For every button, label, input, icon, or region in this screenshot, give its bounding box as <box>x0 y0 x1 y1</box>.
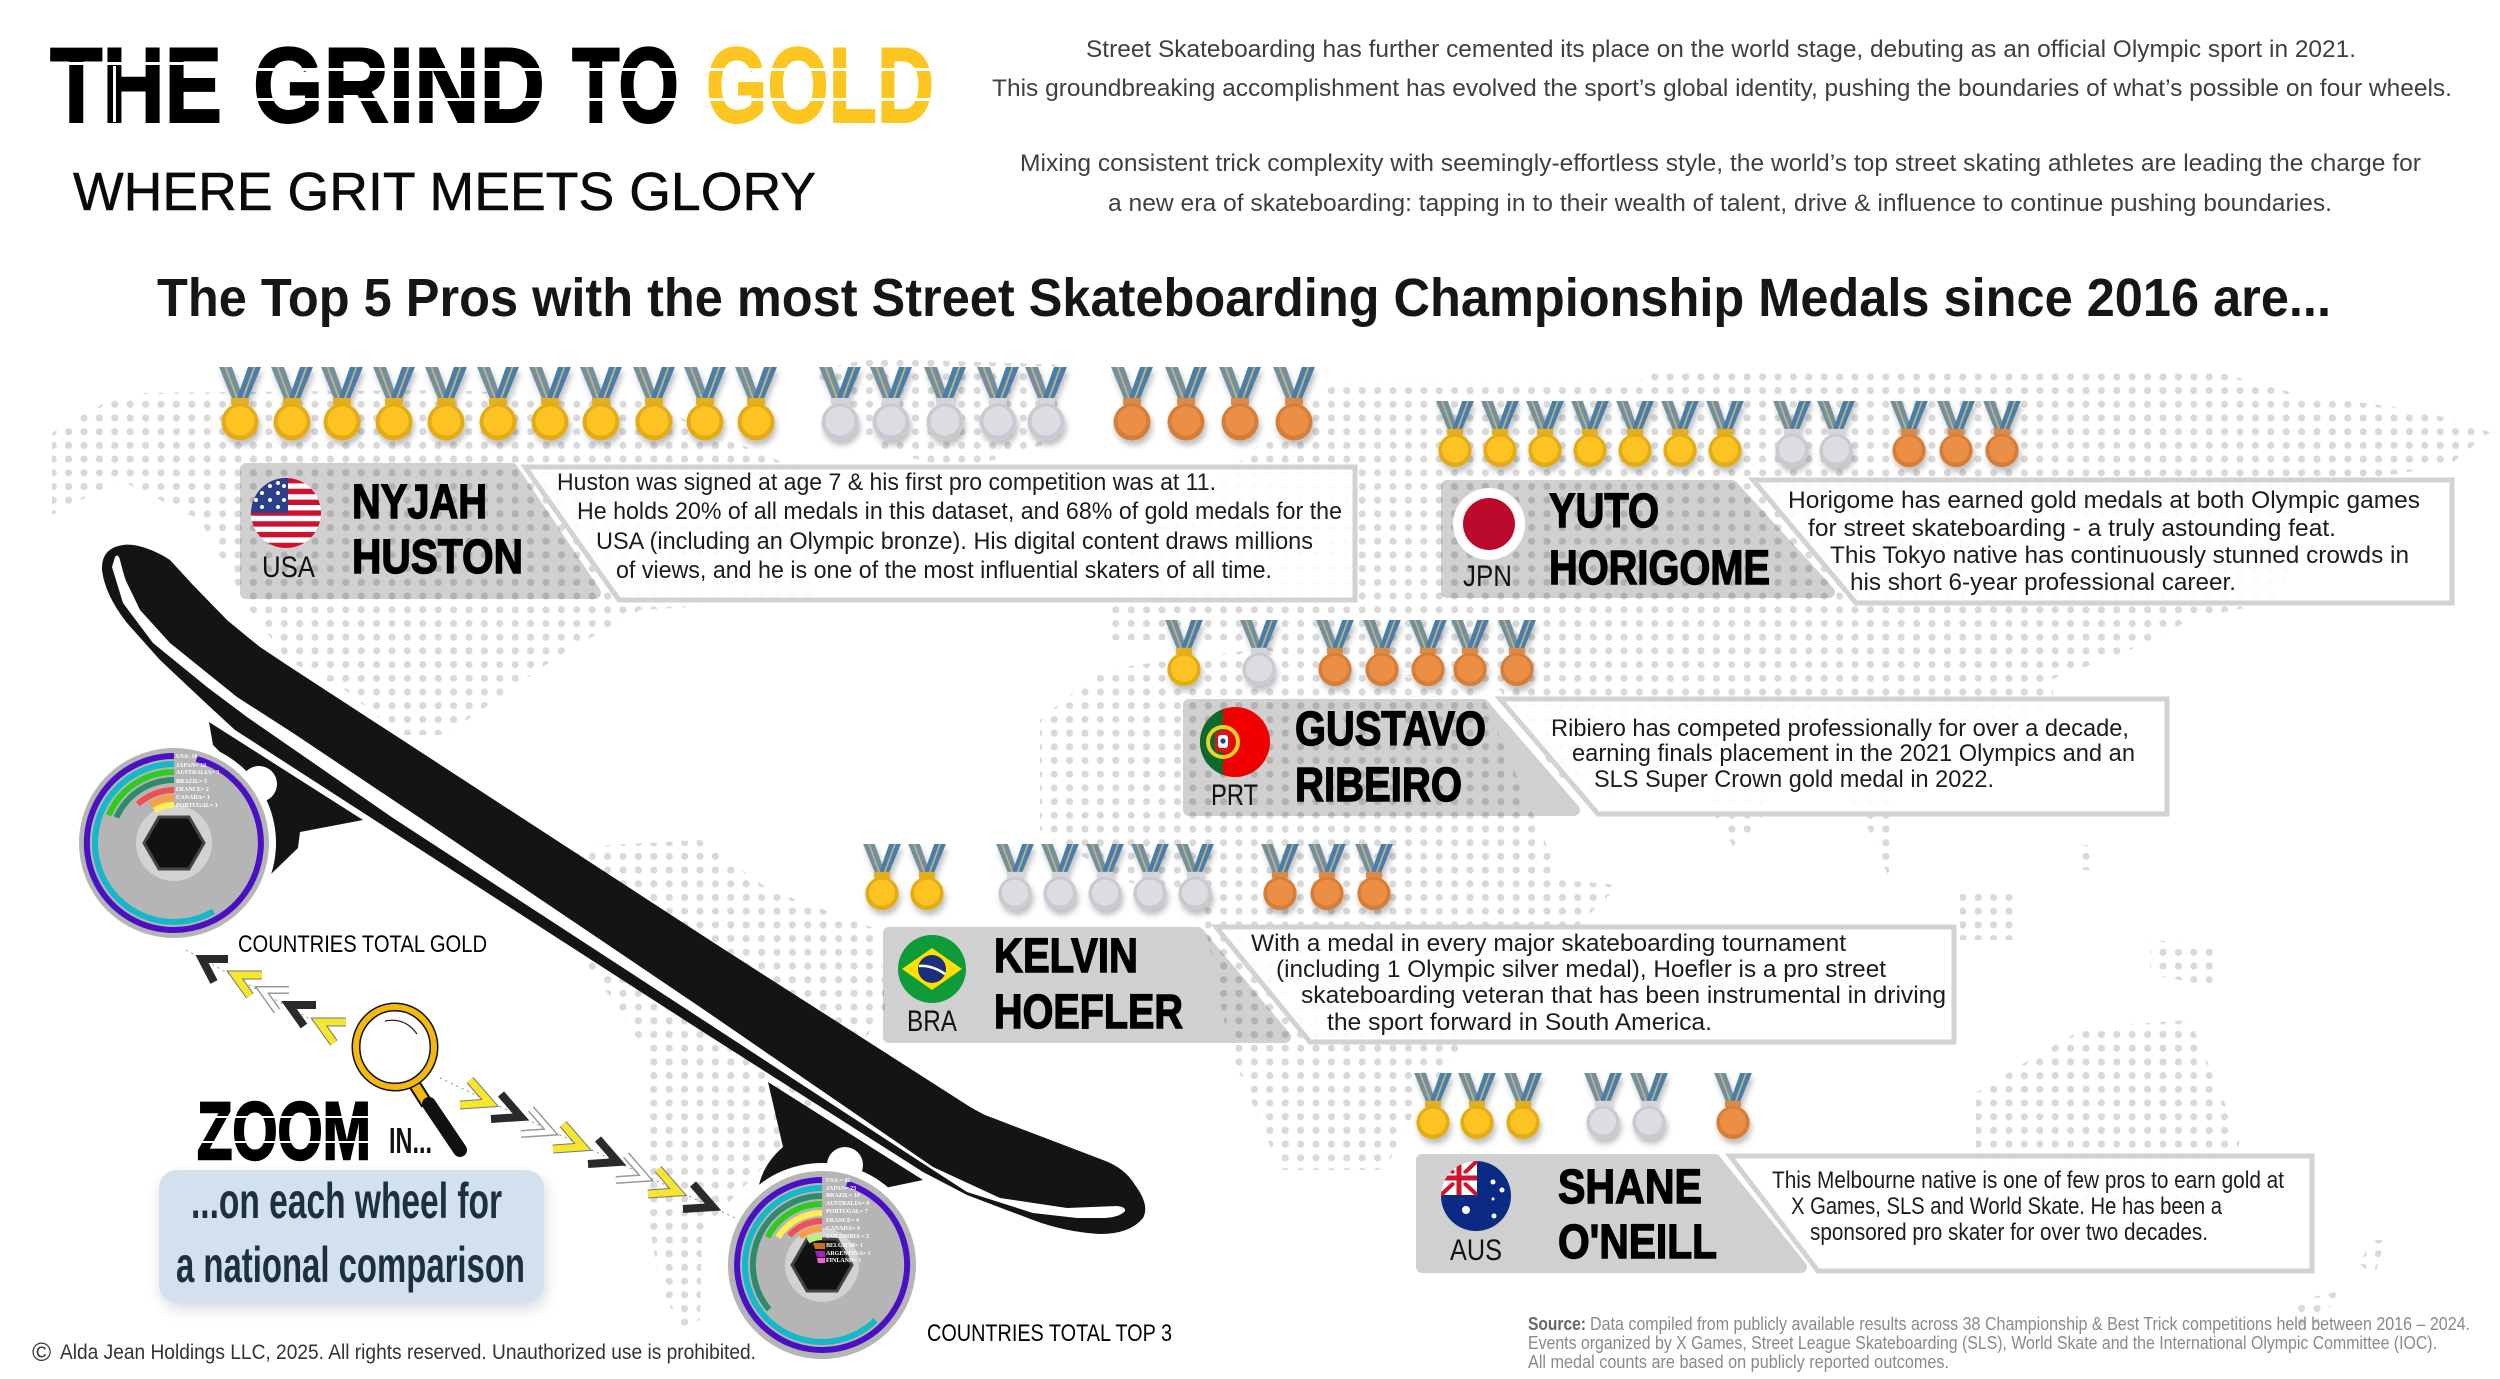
wheel: countries total gold: USA: 16 <box>176 754 198 760</box>
wheel: countries total gold: JAPAN= 12 <box>176 763 206 769</box>
panel: Yuto Horigome <box>1436 401 2452 603</box>
text box: Yuto Horigome <box>1753 480 2452 603</box>
bio: Yuto Horigome: This Tokyo native has continuously stunned crowds in <box>1830 542 2409 569</box>
name plate: Kelvin Hoefler <box>889 933 1285 1037</box>
bio: Kelvin Hoefler: the sport forward in South America. <box>1327 1009 1712 1036</box>
bio: Nyjah Huston: Huston was signed at age 7 & his first pro competition was at 11. <box>557 469 1216 496</box>
name plate: Shane O'Neill <box>1422 1160 1801 1267</box>
text box: Shane O'Neill <box>1730 1156 2312 1271</box>
intro text: This groundbreaking accomplishment has evolved the sport’s global identity, pushing the boundaries of what’s possible on four wheels. <box>992 75 2452 102</box>
title: THE <box>50 25 222 145</box>
source note: All medal counts are based on publicly reported outcomes. <box>1528 1352 1949 1372</box>
bio: Yuto Horigome: for street skateboarding - a truly astounding feat. <box>1808 515 2336 542</box>
bio: Nyjah Huston: of views, and he is one of the most influential skaters of all time. <box>616 557 1272 584</box>
wheel: countries total top 3: COLOMBIA = 2 <box>826 1234 869 1240</box>
country code: PRT: PRT <box>1211 779 1258 812</box>
intro text: Street Skateboarding has further cemented its place on the world stage, debuting as an official Olympic sport in 2021. <box>1086 36 2356 63</box>
bio: Nyjah Huston: He holds 20% of all medals in this dataset, and 68% of gold medals for the <box>577 498 1342 525</box>
bio: Shane O'Neill: This Melbourne native is one of few pros to earn gold at <box>1772 1167 2284 1194</box>
callout: on each wheel: ...on each wheel for <box>191 1173 502 1229</box>
country code: USA: USA <box>262 551 315 584</box>
panel: Gustavo Ribeiro <box>1165 620 2167 814</box>
name plate: Yuto Horigome <box>1447 486 1829 592</box>
bio: Shane O'Neill: sponsored pro skater for over two decades. <box>1810 1219 2208 1246</box>
bio: Shane O'Neill: X Games, SLS and World Skate. He has been a <box>1791 1193 2223 1220</box>
medals: Nyjah Huston <box>219 367 1315 440</box>
text box: Nyjah Huston <box>525 467 1355 600</box>
wheel: countries total top 3: AUSTRALIA= 9 <box>826 1201 869 1207</box>
title: GRIND <box>253 25 545 145</box>
world map dot background <box>52 358 2490 1330</box>
flag: Australia <box>1441 1161 1511 1231</box>
flag: USA <box>251 478 321 548</box>
flag: Portugal <box>1199 706 1271 778</box>
athlete name: Shane O'Neill: O'NEILL <box>1558 1216 1717 1269</box>
title: GOLD <box>706 25 934 145</box>
medals: Gustavo Ribeiro <box>1165 620 1536 686</box>
skateboard <box>102 545 1145 1234</box>
country code: BRA: BRA <box>907 1005 957 1038</box>
bio: Gustavo Ribeiro: SLS Super Crown gold medal in 2022. <box>1594 766 1994 793</box>
wheel: countries total top 3: JAPAN= 23 <box>826 1186 856 1192</box>
wheel: countries total top 3: BELGIUM= 1 <box>826 1243 863 1249</box>
athlete name: Yuto Horigome <box>1549 485 1770 595</box>
arrows: chevrons up-left to front wheel <box>186 950 346 1043</box>
copyright <box>32 1337 756 1367</box>
callout: on each wheel <box>159 1170 544 1303</box>
panel: Kelvin Hoefler <box>863 844 1954 1042</box>
athlete name: Kelvin Hoefler: HOEFLER <box>994 986 1183 1039</box>
wheel caption: gold: COUNTRIES TOTAL GOLD <box>238 931 487 958</box>
wheel: countries total gold: CANADA= 1 <box>176 795 210 801</box>
medals: Yuto Horigome <box>1436 401 2021 467</box>
bio: Yuto Horigome: his short 6-year professional career. <box>1850 569 2236 596</box>
athlete name: Yuto Horigome: YUTO <box>1549 485 1659 538</box>
athlete name: Gustavo Ribeiro: RIBEIRO <box>1295 759 1462 812</box>
wheel: countries total gold: FRANCE= 2 <box>176 787 209 793</box>
country code: AUS: AUS <box>1450 1234 1502 1267</box>
athlete name: Shane O'Neill: SHANE <box>1558 1161 1702 1214</box>
copyright: Alda Jean Holdings LLC, 2025. All rights reserved. Unauthorized use is prohibited. <box>60 1341 756 1364</box>
bio: Shane O'Neill <box>1772 1167 2284 1246</box>
wheel caption: top 3: COUNTRIES TOTAL TOP 3 <box>927 1320 1172 1347</box>
callout: on each wheel: a national comparison <box>176 1237 525 1293</box>
athlete name: Gustavo Ribeiro: GUSTAVO <box>1295 703 1486 756</box>
wheel: countries total top 3 <box>720 1163 924 1367</box>
zoom in label: ZOOM <box>197 1086 371 1177</box>
intro text <box>992 36 2452 217</box>
bio: Gustavo Ribeiro: Ribiero has competed professionally for over a decade, <box>1551 715 2129 742</box>
athlete name: Nyjah Huston: HUSTON <box>352 531 523 584</box>
text box: Kelvin Hoefler <box>1216 927 1954 1042</box>
bio: Yuto Horigome: Horigome has earned gold medals at both Olympic games <box>1788 487 2420 514</box>
athlete name: Kelvin Hoefler: KELVIN <box>994 930 1138 983</box>
arrows: chevrons down-right to rear wheel <box>440 1078 735 1218</box>
name plate: Gustavo Ribeiro <box>1189 705 1574 810</box>
wheel: countries total top 3: ARGENTINA= 1 <box>826 1251 871 1257</box>
wheel: countries total top 3: FINLAND= 1 <box>826 1258 861 1264</box>
wheel: countries total gold: BRAZIL= 3 <box>176 779 207 785</box>
athlete name: Nyjah Huston <box>352 476 523 584</box>
bio: Nyjah Huston: USA (including an Olympic bronze). His digital content draws millions <box>596 528 1313 555</box>
zoom in label: IN... <box>389 1120 432 1161</box>
bio: Nyjah Huston <box>557 469 1342 584</box>
medals: Shane O'Neill <box>1414 1073 1752 1139</box>
athlete name: Nyjah Huston: NYJAH <box>352 476 487 529</box>
intro text: Mixing consistent trick complexity with seemingly-effortless style, the world’s top street skating athletes are leading the charge for <box>1020 150 2421 177</box>
wheel: countries total top 3: CANADA= 4 <box>826 1226 860 1232</box>
flag: Brazil <box>898 935 966 1003</box>
text box: Gustavo Ribeiro <box>1500 699 2167 814</box>
wheel: countries total gold: PORTUGAL= 1 <box>176 803 218 809</box>
source note <box>1528 1314 2470 1372</box>
athlete name: Kelvin Hoefler <box>994 930 1183 1039</box>
copyright: © <box>32 1337 51 1367</box>
bio: Kelvin Hoefler: skateboarding veteran that has been instrumental in driving <box>1301 982 1946 1009</box>
bio: Kelvin Hoefler: (including 1 Olympic silver medal), Hoefler is a pro street <box>1276 956 1886 983</box>
wheel: countries total gold <box>72 741 276 945</box>
athlete name: Gustavo Ribeiro <box>1295 703 1486 812</box>
panel: Nyjah Huston <box>219 367 1355 600</box>
country code: JPN: JPN <box>1463 560 1512 593</box>
medals: Kelvin Hoefler <box>863 844 1393 910</box>
wheel: countries total gold: AUSTRALIA= 3 <box>176 770 219 776</box>
source note: Source: <box>1528 1314 1586 1334</box>
subtitle: WHERE GRIT MEETS GLORY <box>73 162 816 222</box>
heading: The Top 5 Pros with the most Street Skateboarding Championship Medals since 2016 are... <box>157 268 2331 328</box>
wheel: countries total top 3: BRAZIL= 10 <box>826 1193 860 1199</box>
title: TO <box>572 25 679 145</box>
icon: magnifying glass <box>356 1007 460 1150</box>
flag: Japan <box>1453 488 1525 560</box>
bio: Yuto Horigome <box>1788 487 2420 596</box>
athlete name: Shane O'Neill <box>1558 1161 1717 1269</box>
name plate: Nyjah Huston <box>246 469 595 593</box>
title <box>50 25 934 145</box>
bio: Gustavo Ribeiro: earning finals placement in the 2021 Olympics and an <box>1572 740 2135 767</box>
intro text: a new era of skateboarding: tapping in to their wealth of talent, drive & influence to continue pushing boundaries. <box>1108 190 2332 217</box>
wheel: countries total top 3: USA = 42 <box>826 1178 850 1184</box>
panel: Shane O'Neill <box>1414 1073 2312 1271</box>
athlete name: Yuto Horigome: HORIGOME <box>1549 542 1770 595</box>
bio: Gustavo Ribeiro <box>1551 715 2135 793</box>
wheel: countries total top 3: FRANCE= 4 <box>826 1218 859 1224</box>
bio: Kelvin Hoefler: With a medal in every major skateboarding tournament <box>1251 930 1846 957</box>
wheel: countries total top 3: PORTUGAL= 7 <box>826 1209 868 1215</box>
bio: Kelvin Hoefler <box>1251 930 1946 1036</box>
